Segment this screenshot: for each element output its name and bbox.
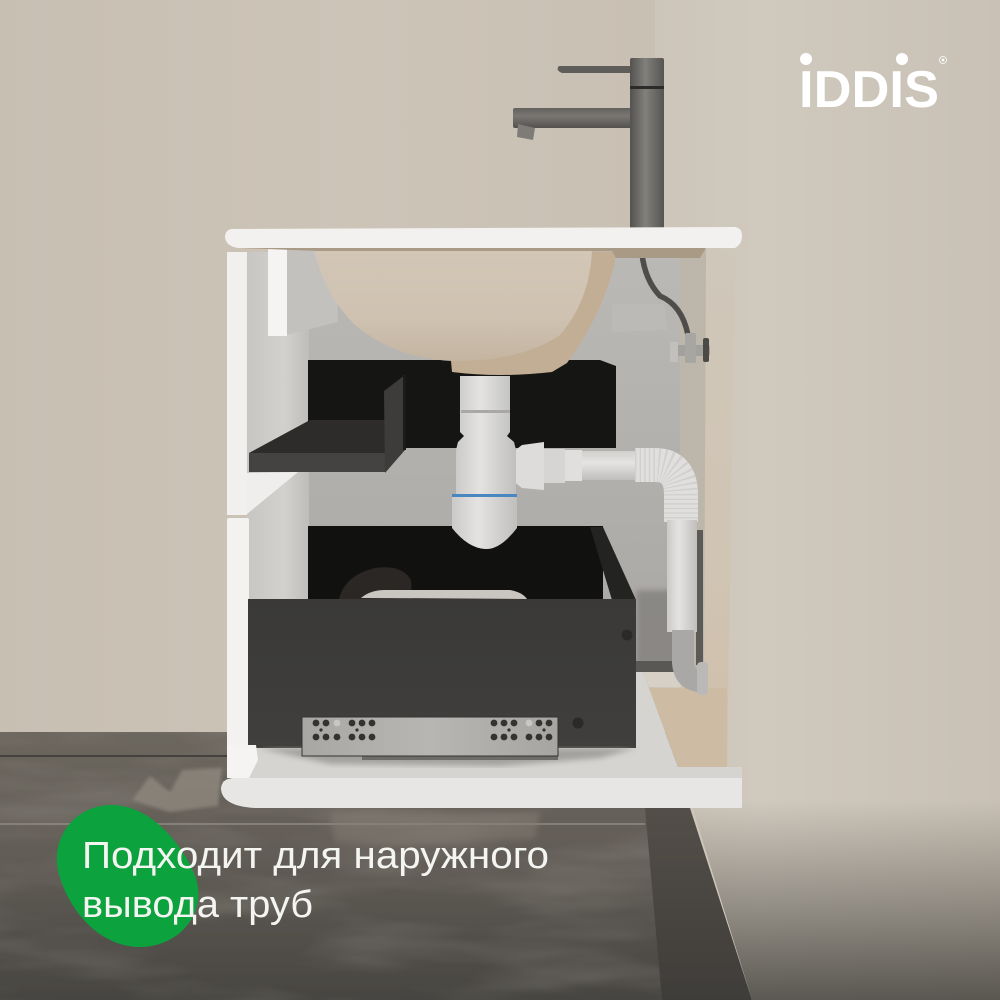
left white panel lower xyxy=(227,518,249,778)
caption line 1: Подходит для наружного xyxy=(82,835,549,877)
tray: front face xyxy=(249,453,386,472)
logo registered mark xyxy=(940,56,946,64)
tray: divider xyxy=(384,375,405,473)
faucet: aerator xyxy=(517,124,535,140)
background: right wall xyxy=(655,0,1000,1000)
countertop underside xyxy=(240,248,706,258)
upper drawer tray xyxy=(249,375,406,473)
logo xyxy=(799,53,946,119)
siphon: collar xyxy=(456,376,516,500)
caption line 2: вывода труб xyxy=(82,884,313,926)
caption xyxy=(82,835,549,926)
drawer rail plate xyxy=(302,717,558,760)
shadow beside drain xyxy=(696,530,703,665)
siphon: cup xyxy=(452,497,517,549)
background: left wall xyxy=(0,0,720,735)
siphon xyxy=(452,376,681,549)
cabinet inner left side xyxy=(247,252,309,602)
floor: marble side step xyxy=(645,808,752,1000)
logo i dots xyxy=(800,53,908,65)
floor: marble xyxy=(0,732,680,1000)
faucet xyxy=(513,58,664,230)
shadow under drawer xyxy=(258,748,636,766)
lower drawer right wall xyxy=(590,527,636,600)
drain pipe vertical xyxy=(667,520,697,632)
left panel foot xyxy=(227,745,258,778)
left white panel upper xyxy=(227,252,247,515)
drawer screw top xyxy=(622,630,632,640)
wall at bottom right xyxy=(690,800,1000,1000)
faucet: handle xyxy=(558,66,634,73)
upper drawer back panel xyxy=(308,360,616,448)
siphon: flexible elbow xyxy=(635,465,681,522)
cabinet back wall xyxy=(300,250,685,675)
plinth dark strip xyxy=(636,661,682,672)
sink bowl outer shell xyxy=(450,250,617,375)
siphon: nut xyxy=(509,442,544,490)
siphon: side outlet xyxy=(575,451,640,480)
angle valve xyxy=(670,333,710,363)
tan triangle xyxy=(649,688,727,767)
grey block on back wall xyxy=(612,304,668,332)
lower drawer front xyxy=(248,599,636,748)
drawer screw bottom xyxy=(572,718,584,728)
lower drawer interior xyxy=(308,526,603,602)
white diagonal edge xyxy=(247,472,298,514)
base shelf top surface xyxy=(222,672,742,782)
green blob xyxy=(57,805,198,947)
bowl in drawer xyxy=(361,590,527,599)
sink bowl xyxy=(314,250,592,361)
faucet: body xyxy=(630,58,664,230)
water supply hose xyxy=(642,254,688,335)
bottom ledge cover xyxy=(643,672,681,687)
bracket top left xyxy=(268,249,338,336)
shadow behind drawer right xyxy=(636,590,682,665)
bottle in drawer xyxy=(339,567,412,599)
cabinet inner tan side xyxy=(680,250,735,768)
logo wordmark: IDDIS xyxy=(799,61,939,119)
countertop xyxy=(225,227,742,248)
drain pipe elbow xyxy=(683,630,708,695)
siphon: blue ring xyxy=(452,494,517,497)
faucet: spout xyxy=(513,108,635,128)
tray: top surface xyxy=(249,420,386,453)
base shelf front xyxy=(221,778,742,808)
